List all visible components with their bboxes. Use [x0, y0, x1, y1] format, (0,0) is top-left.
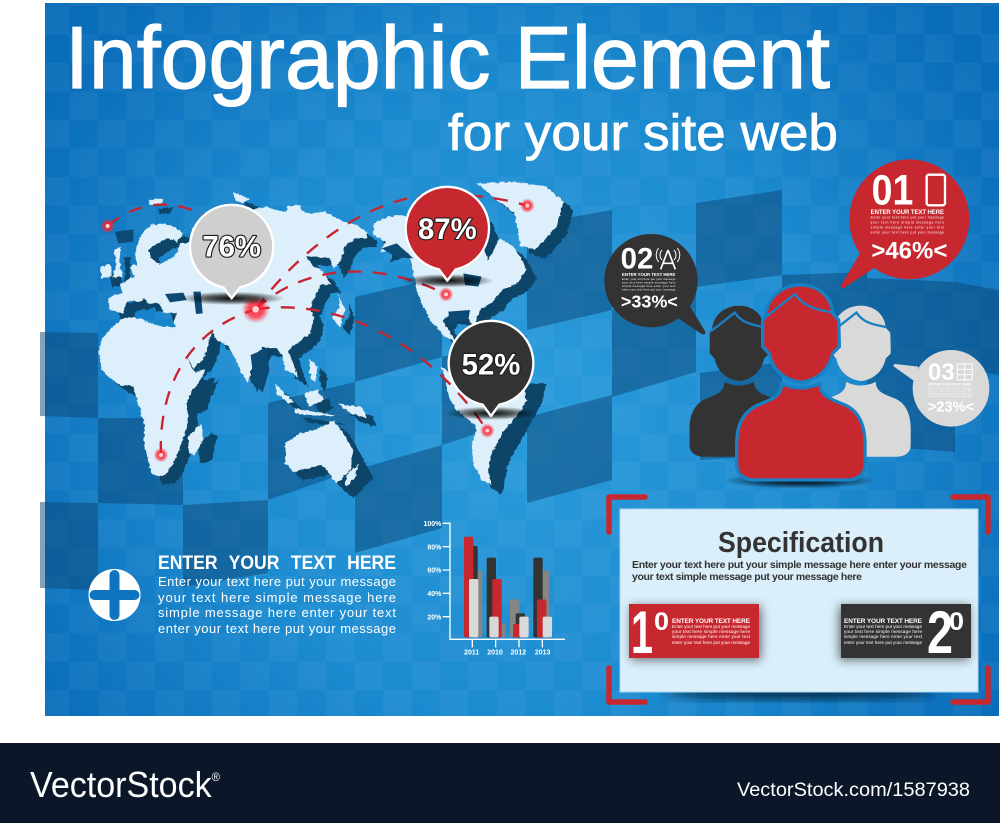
- text lines: [158, 574, 396, 636]
- axis labels: 100%: [423, 521, 442, 528]
- location markers: [100, 198, 535, 462]
- specification description: Enter your text here put your simple message here enter your message: [632, 559, 967, 571]
- person: dark: [690, 306, 789, 457]
- inland seas: [115, 229, 482, 393]
- red label 1: [629, 599, 761, 666]
- bar chart: 2010: [487, 649, 503, 656]
- icon: phone: [927, 175, 945, 205]
- footer logo: ®: [212, 770, 220, 784]
- icon: document: [957, 364, 972, 380]
- bubble 02: enter your text here put your message: [622, 288, 676, 292]
- dark label 2: enter your text here put your message: [844, 640, 922, 645]
- bubble 01: 01: [872, 166, 913, 214]
- dashed connection routes: [108, 195, 527, 455]
- footer url: VectorStock.com/1587938: [737, 780, 970, 801]
- pin: 87%: 87%: [418, 213, 477, 246]
- red label 1: your text here simple message here: [672, 629, 750, 634]
- bar chart: 2011: [464, 649, 479, 656]
- bubble 03: Enter your text here put your message: [928, 387, 972, 390]
- bubble 01: your text here simple message here: [871, 220, 944, 224]
- dark label 2: [839, 599, 971, 666]
- continent shadows: [108, 190, 573, 498]
- icon: plus: [88, 569, 140, 621]
- bubble 01: simple message here enter your text: [871, 225, 944, 229]
- bubble 03: enter your text here put your message: [928, 395, 972, 398]
- bubble 02: 02: [621, 243, 653, 276]
- bubble 02: Enter your text here put your message: [622, 277, 676, 281]
- subtitle: for your site web: [448, 104, 838, 161]
- axis labels: 40%: [427, 591, 442, 598]
- axis labels: 60%: [427, 568, 442, 575]
- text lines: simple message here enter your text: [158, 605, 396, 620]
- floor shadow: [723, 473, 877, 489]
- bubble 01: Enter your text here put your message: [871, 216, 944, 220]
- bars 2012: [510, 599, 529, 637]
- text lines: enter your text here put your message: [158, 621, 396, 636]
- red label 1: enter your text here put your message: [672, 640, 750, 645]
- dark label 2: 0: [949, 608, 964, 636]
- panel background: [620, 509, 978, 692]
- bubble 03: >23%<: [928, 400, 974, 416]
- panel bottom shadow: [665, 687, 935, 699]
- pin: 52%: 52%: [462, 349, 520, 382]
- bars 2013: [533, 558, 552, 637]
- pin: 87%: [401, 187, 494, 287]
- red label 1: 1: [631, 599, 653, 666]
- pin: 52%: [444, 321, 538, 420]
- specification description: [632, 559, 967, 583]
- bubble 03: your text here simple message here: [928, 390, 972, 393]
- bubble 03: 03: [928, 359, 955, 386]
- dark label 2: 2: [927, 599, 953, 666]
- text lines: your text here simple message here: [158, 590, 396, 605]
- panel: specification: [609, 497, 988, 702]
- bubble 02: ENTER YOUR TEXT HERE: [622, 272, 675, 277]
- checkered wave band: [40, 190, 999, 590]
- bars 2011: [464, 537, 482, 637]
- people and speech bubbles: [604, 159, 989, 489]
- bars 2010: [487, 558, 505, 637]
- bubble 02: simple message here enter your text: [622, 284, 676, 288]
- text block with plus icon: [88, 553, 396, 636]
- bar chart: 2012: [511, 649, 526, 656]
- bubble 03: [893, 350, 989, 427]
- dark label 2: simple message here enter your text: [844, 634, 923, 639]
- world map: [98, 182, 573, 498]
- bar chart: [423, 521, 565, 656]
- axis labels: [423, 521, 442, 621]
- axis labels: 80%: [427, 544, 442, 551]
- footer logo: VectorStock: [30, 764, 222, 805]
- bubble 02: >33%<: [621, 292, 678, 312]
- icon: antenna: [656, 248, 680, 269]
- title: Infographic Element: [65, 8, 830, 107]
- bubble 02: [604, 234, 705, 334]
- bubble 01: enter your text here put your message: [871, 230, 944, 234]
- footer bar: [0, 743, 1000, 823]
- red label 1: ENTER YOUR TEXT HERE: [672, 618, 751, 625]
- pin: 76%: 76%: [202, 231, 261, 264]
- bubble 01: >46%<: [871, 237, 947, 264]
- specification description: your text simple message put your message here: [632, 571, 862, 583]
- specification heading: Specification: [718, 527, 884, 559]
- axes: [443, 523, 565, 647]
- bubble 03: simple message here enter your text: [928, 392, 972, 395]
- dark label 2: your text here simple message here: [844, 629, 922, 634]
- bar chart: 2013: [535, 649, 551, 656]
- bubble 03: ENTER YOUR TEXT HERE: [928, 383, 972, 387]
- bubble 01: [841, 159, 969, 288]
- axis labels: 20%: [427, 614, 442, 621]
- dark label 2: ENTER YOUR TEXT HERE: [844, 618, 923, 625]
- red corner brackets: [609, 497, 988, 702]
- red label 1: 0: [654, 608, 669, 636]
- text heading: ENTER YOUR TEXT HERE: [158, 553, 396, 574]
- continents: [98, 182, 563, 487]
- red label 1: simple message here enter your text: [672, 634, 751, 639]
- text lines: Enter your text here put your message: [158, 574, 396, 589]
- bubble 02: your text here simple message here: [622, 280, 676, 284]
- dark label 2: Enter your text here put your message: [844, 624, 922, 629]
- pin: 76%: [178, 205, 285, 305]
- person: light grey: [811, 306, 911, 457]
- bubble 01: ENTER YOUR TEXT HERE: [871, 210, 944, 216]
- red label 1: Enter your text here put your message: [672, 624, 750, 629]
- person: red: [737, 285, 865, 480]
